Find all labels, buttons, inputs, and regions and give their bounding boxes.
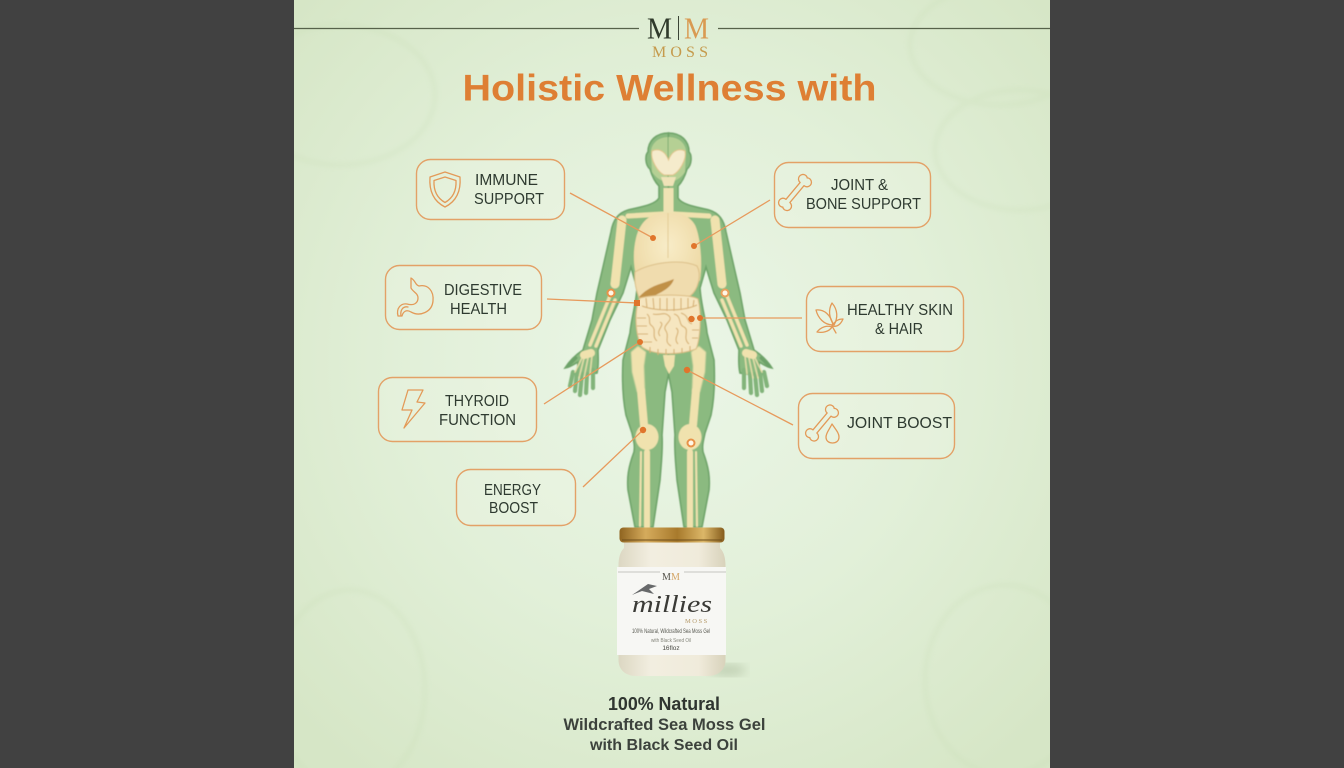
- jar label: 100% Natural, Wildcrafted Sea Moss Gel: [632, 629, 710, 635]
- callout: joint and bone support: [774, 162, 930, 228]
- jar label: [617, 567, 726, 655]
- intestines: [636, 295, 700, 355]
- callout: joint and bone support: JOINT &: [831, 177, 888, 194]
- neck vertebrae: [664, 188, 674, 214]
- title: Holistic Wellness with: [462, 66, 876, 108]
- jar label: 16floz: [662, 645, 680, 652]
- callout: energy boost: ENERGY: [484, 482, 541, 499]
- callout: thyroid function: FUNCTION: [439, 412, 516, 429]
- header logo: M: [684, 10, 709, 46]
- bottom product description: 100% Natural: [608, 694, 720, 714]
- callout: energy boost: [456, 470, 576, 526]
- callout: joint boost: JOINT BOOST: [847, 415, 952, 432]
- human body anatomy figure: [565, 133, 772, 527]
- header logo: M: [647, 10, 672, 46]
- icon: lightning bolt: [402, 390, 425, 428]
- callout: immune support: IMMUNE: [475, 172, 538, 189]
- callout: joint boost: [798, 394, 954, 458]
- product jar: [617, 528, 746, 676]
- callout: digestive health: HEALTH: [450, 301, 507, 318]
- jar lid: [620, 528, 724, 542]
- callout: healthy skin and hair: [806, 286, 964, 352]
- skull sinuses: [652, 150, 685, 175]
- icon: shield: [430, 172, 460, 207]
- callout: healthy skin and hair: HEALTHY SKIN: [847, 302, 953, 319]
- bottom product description: with Black Seed Oil: [589, 737, 738, 754]
- icon: leaves: [816, 303, 843, 333]
- callout: thyroid function: THYROID: [445, 393, 509, 410]
- callout: energy boost: BOOST: [489, 500, 538, 517]
- header logo: MOSS: [652, 44, 708, 61]
- bottom product description: [564, 694, 766, 754]
- page background: [294, 0, 1050, 768]
- jar label: MOSS: [685, 618, 709, 625]
- bottom product description: Wildcrafted Sea Moss Gel: [564, 716, 766, 734]
- callout: thyroid function: [378, 378, 536, 442]
- jar label: M: [662, 572, 671, 583]
- connector lines: [544, 193, 802, 487]
- icon: bone and drop: [804, 403, 840, 443]
- jar label: with Black Seed Oil: [650, 638, 691, 644]
- icon: bone: [777, 173, 813, 212]
- pelvis centre: [663, 355, 675, 374]
- body markers: [608, 235, 728, 446]
- callout: immune support: [416, 160, 564, 220]
- callout: healthy skin and hair: & HAIR: [875, 321, 923, 338]
- gallbladder strip: [639, 279, 674, 301]
- header logo: [294, 10, 1050, 61]
- callout: immune support: SUPPORT: [474, 191, 544, 208]
- jar label: millies: [632, 592, 712, 618]
- jaw: [661, 177, 676, 186]
- rib cage: [634, 213, 701, 295]
- icon: stomach: [398, 278, 433, 316]
- callout: digestive health: DIGESTIVE: [444, 282, 522, 299]
- jar label: M: [671, 572, 680, 583]
- callout: joint and bone support: BONE SUPPORT: [806, 196, 921, 213]
- liver: [635, 262, 699, 300]
- jar body: [618, 542, 726, 676]
- callout: digestive health: [386, 266, 542, 330]
